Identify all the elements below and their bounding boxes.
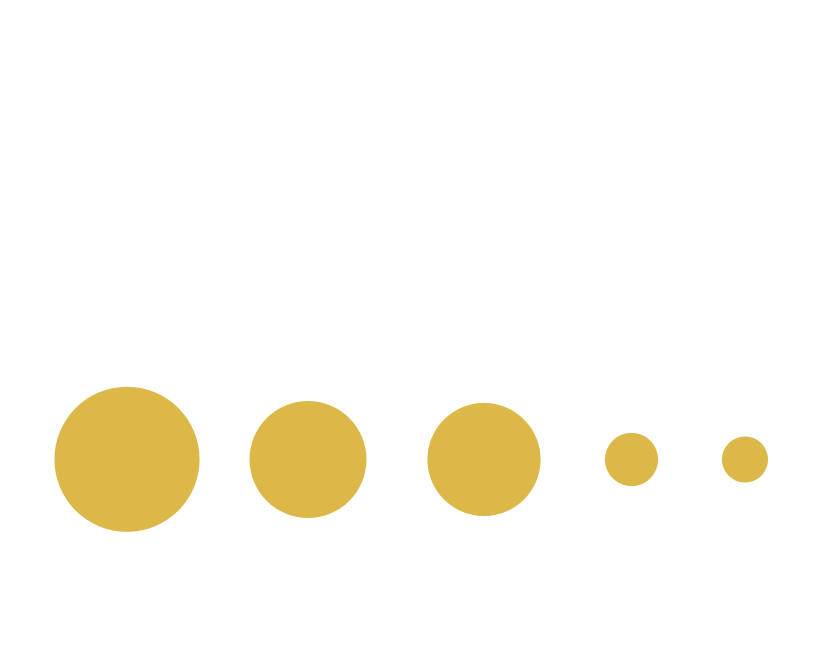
bubble 1 xyxy=(54,387,200,532)
bubble 5 xyxy=(722,436,768,482)
bubble 3 xyxy=(427,403,541,516)
bubble 2 xyxy=(250,401,366,518)
bubble 4 xyxy=(605,433,658,486)
